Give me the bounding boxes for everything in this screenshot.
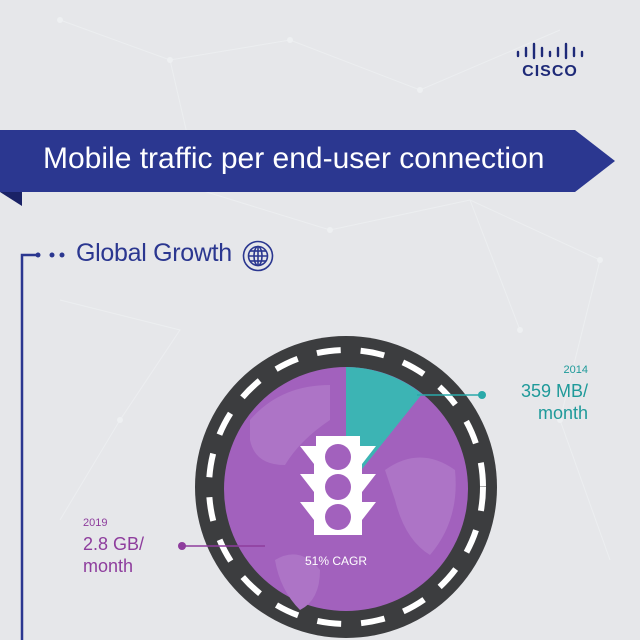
label: 2014: month xyxy=(538,403,588,423)
label: 2014: 2014 xyxy=(564,364,588,376)
title banner: Mobile traffic per end-user connection xyxy=(43,142,544,175)
cisco logo xyxy=(516,42,584,80)
chart: road globe: 51% CAGR xyxy=(305,554,367,568)
connector line xyxy=(20,252,64,640)
label: 2019: month xyxy=(83,556,133,576)
label: 2019: 2019 xyxy=(83,517,107,529)
heading: Global Growth: Global Growth xyxy=(76,239,232,267)
title banner xyxy=(0,130,615,206)
icon: globe xyxy=(242,240,274,272)
label: 2014: 359 MB/ xyxy=(521,381,588,401)
label: 2019: 2.8 GB/ xyxy=(83,534,144,554)
cisco logo: CISCO xyxy=(522,63,578,80)
label: 2014 xyxy=(521,364,588,423)
label: 2019 xyxy=(83,517,144,576)
traffic light icon xyxy=(300,436,376,535)
map shapes xyxy=(250,385,456,610)
